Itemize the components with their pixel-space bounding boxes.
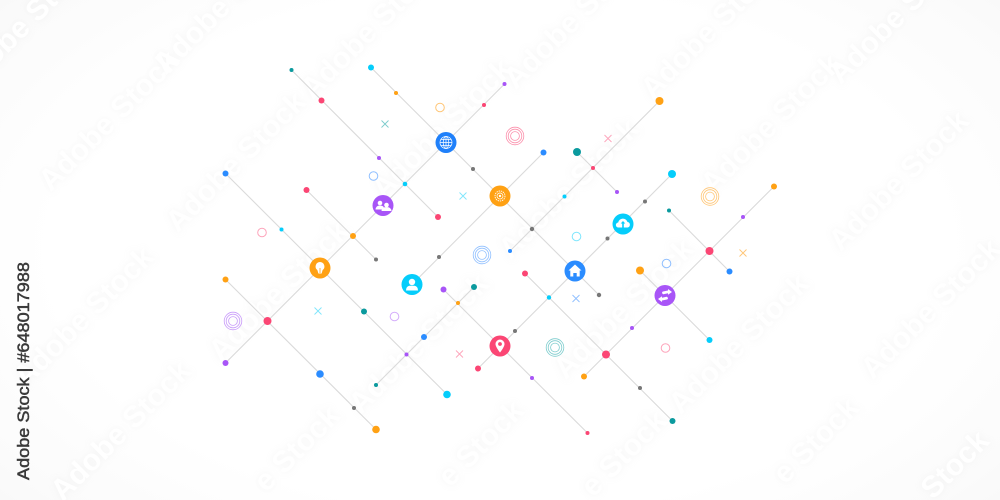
watermarks: e Stock bbox=[432, 394, 531, 493]
icon: cloud upload bbox=[612, 214, 634, 234]
icon: user bbox=[402, 274, 422, 295]
watermarks: Adobe Stock bbox=[159, 85, 313, 238]
node dots bbox=[222, 64, 777, 435]
icon: target gear bbox=[490, 186, 510, 206]
watermarks: Adobe Stock bbox=[822, 104, 976, 257]
concentric targets bbox=[224, 127, 719, 356]
icon: home bbox=[564, 260, 586, 282]
stock id caption: Adobe Stock | #648017988 bbox=[14, 262, 33, 480]
watermarks: e Stock bbox=[248, 399, 347, 498]
watermarks: Adobe Stock bbox=[7, 240, 161, 393]
watermarks: Adobe Stock bbox=[342, 267, 496, 420]
watermarks: Adobe Stock bbox=[492, 112, 646, 265]
watermarks: Adobe Stock bbox=[547, 232, 701, 385]
icon: users bbox=[372, 195, 394, 216]
icon: globe bbox=[436, 132, 456, 153]
icon: light bulb bbox=[310, 258, 330, 278]
watermarks: e Stock bbox=[767, 391, 866, 490]
icon: exchange arrows bbox=[654, 285, 676, 306]
watermarks: Adobe Stock bbox=[202, 214, 356, 367]
cross marks bbox=[314, 120, 746, 358]
connector lines bbox=[226, 68, 774, 433]
icon: map pin bbox=[490, 336, 510, 356]
watermarks: Adobe Stock bbox=[365, 52, 519, 205]
watermarks: Adobe Stock bbox=[32, 44, 186, 197]
hollow rings bbox=[258, 103, 671, 352]
watermarks: Adobe Stock bbox=[662, 267, 816, 420]
watermarks: Adobe Stock bbox=[694, 47, 848, 200]
